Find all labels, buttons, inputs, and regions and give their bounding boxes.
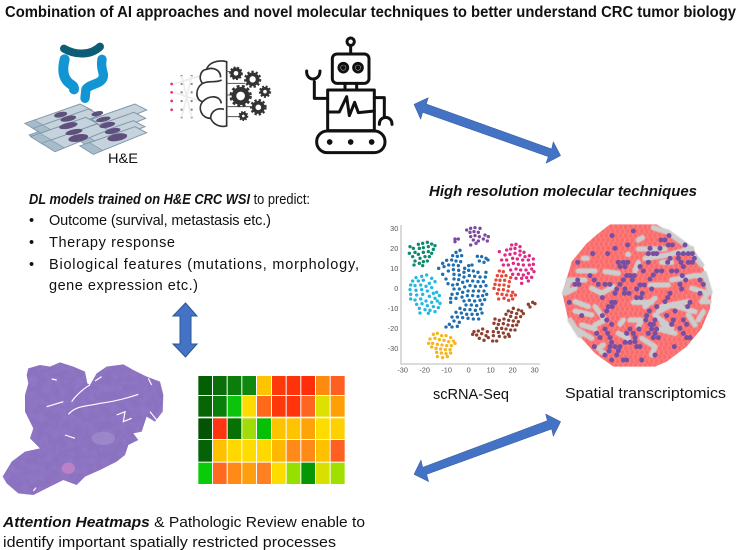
label: H&E: H&E [108, 150, 138, 166]
scRNA-Seq scatter plot [388, 224, 540, 375]
scRNA-Seq scatter plot: 20 [390, 244, 398, 253]
scRNA-Seq scatter plot: -30 [397, 366, 408, 375]
label: scRNA-Seq: scRNA-Seq [433, 386, 509, 403]
attention heatmap [198, 376, 345, 484]
text block: DL models: Therapy response [49, 235, 175, 251]
scRNA-Seq scatter plot: -10 [441, 366, 452, 375]
scRNA-Seq scatter plot: 0 [394, 284, 398, 293]
scRNA-Seq scatter plot: 10 [487, 366, 495, 375]
arrow: vertical double [173, 303, 197, 357]
heading: molecular techniques: High resolution molecular techniques [429, 183, 697, 200]
icon: AI brain with gears [172, 61, 270, 126]
text block: DL models: gene expression etc.) [49, 278, 198, 294]
H&E whole slide image [3, 362, 163, 495]
scRNA-Seq scatter plot: 0 [467, 366, 471, 375]
spatial transcriptomics spot map [562, 224, 712, 367]
text block: attention heatmaps: Attention Heatmaps & Pathologic Review enable to [2, 515, 365, 531]
scRNA-Seq scatter plot: 30 [531, 366, 539, 375]
scRNA-Seq scatter plot: -20 [388, 324, 398, 333]
text block: DL models: Biological features (mutations, morphology, [49, 257, 359, 273]
arrow: robot to molecular techniques [414, 98, 561, 163]
icon: H&E slides stack [25, 104, 147, 154]
text block: DL models: • [29, 213, 34, 229]
text block: attention heatmaps [2, 515, 365, 550]
text block: DL models: Outcome (survival, metastasis etc.) [49, 213, 271, 229]
arrow: spatial to heatmap [414, 414, 561, 482]
scRNA-Seq scatter plot: -30 [388, 344, 398, 353]
scRNA-Seq scatter plot: 20 [509, 366, 517, 375]
text block: DL models: DL models trained on H&E CRC WSI to predict: [29, 192, 310, 208]
scRNA-Seq scatter plot: -20 [419, 366, 430, 375]
scRNA-Seq scatter plot: -10 [388, 304, 398, 313]
scRNA-Seq scatter plot: 10 [390, 264, 398, 273]
scRNA-Seq scatter plot: 30 [390, 224, 398, 233]
text block: DL models: • [29, 235, 34, 251]
icon: colon [63, 47, 103, 98]
icon: robot [307, 38, 392, 153]
text block: DL models: • [29, 257, 34, 273]
label: Spatial transcriptomics: Spatial transcriptomics [565, 385, 726, 402]
text block: DL models [29, 192, 359, 294]
